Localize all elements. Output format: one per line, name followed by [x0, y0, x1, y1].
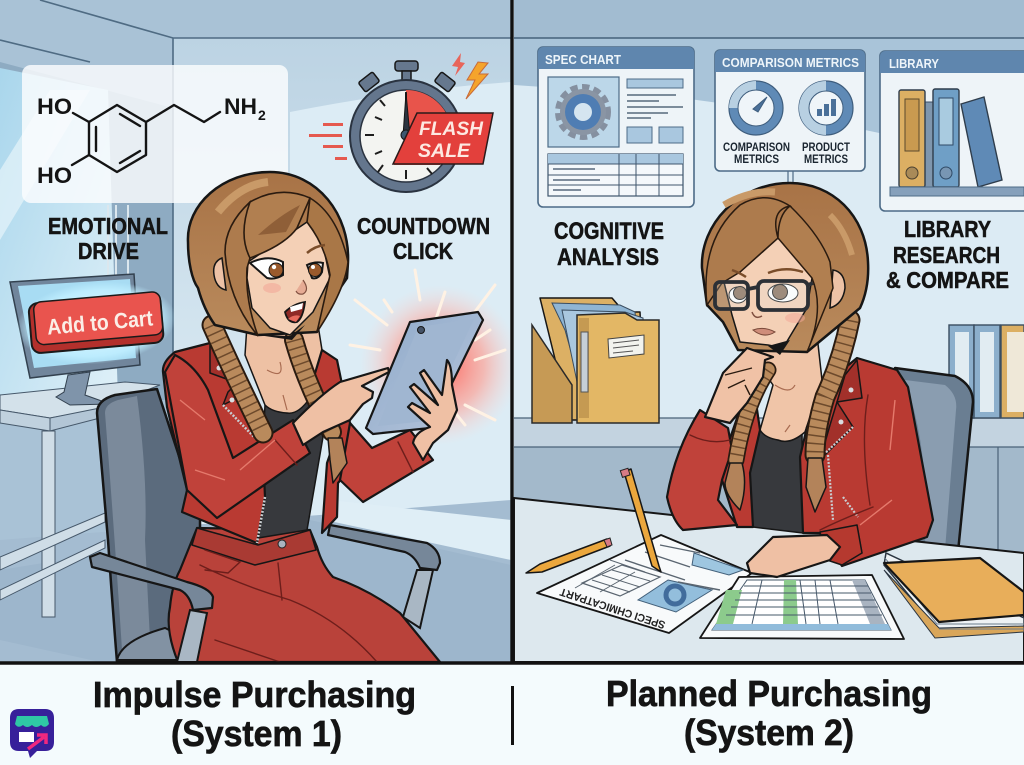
ear right: [830, 270, 845, 308]
bangs: [244, 192, 310, 258]
title: impulse purchasing: (System 1): [171, 713, 342, 754]
holding hand: [408, 360, 457, 460]
right braid: [294, 340, 347, 483]
heading: emotional drive: EMOTIONAL: [48, 213, 168, 239]
chair back and right armrest: [97, 389, 440, 662]
icon: pencil on desk: [526, 538, 612, 573]
glasses: [715, 281, 813, 310]
title: impulse purchasing: Impulse Purchasing: [93, 674, 416, 715]
head and hair: [188, 172, 348, 340]
desk surface: [514, 498, 1024, 662]
heading: library research and compare: [886, 216, 1009, 293]
title: impulse purchasing: [93, 674, 416, 754]
icon: stopwatch with flash sale tag: SALE: [418, 140, 471, 162]
spec sheet: SPECI CHMICATPART: [558, 585, 667, 631]
title: planned purchasing: (System 2): [684, 712, 854, 753]
icon: gauge dial: [729, 81, 783, 135]
left braid right figure: [725, 370, 768, 510]
face right: [723, 238, 812, 348]
jacket: [163, 343, 433, 543]
chin shadow: [768, 340, 790, 355]
bottom caption band background: [0, 662, 1024, 765]
card: comparison metrics: COMPARISON: [723, 142, 790, 154]
card: comparison metrics: METRICS: [734, 154, 779, 166]
title: planned purchasing: Planned Purchasing: [606, 673, 932, 714]
label background panel: dopamine molecule: HO: [37, 94, 72, 119]
left front strand: [225, 202, 258, 336]
spreadsheet: [700, 575, 904, 639]
heading: emotional drive: DRIVE: [78, 238, 139, 264]
pants: [169, 528, 440, 662]
bangs right: [706, 198, 790, 305]
office background right: [514, 0, 1024, 562]
woman: impulse buyer: [163, 172, 483, 662]
office background left: [0, 0, 511, 662]
pointing hand: [293, 368, 389, 445]
icon: gear: [559, 88, 607, 136]
panel: impulse purchasing scene: [0, 0, 520, 662]
icon: pencil on paper: [620, 468, 661, 572]
hair back: [188, 172, 348, 335]
shadow under chin: [258, 325, 305, 340]
panel: planned purchasing scene: [514, 0, 1024, 662]
forearm up to chin: [667, 410, 737, 530]
hand on desk: [747, 535, 840, 577]
desk items: [526, 468, 1024, 639]
heading: emotional drive: [48, 213, 168, 264]
icon: bar metric dial: [799, 81, 853, 135]
label background panel: dopamine molecule: NH: [224, 94, 257, 119]
left braid: [212, 325, 263, 433]
chest right: [745, 335, 822, 441]
hair back right: [702, 183, 868, 352]
spec sheet: [537, 535, 752, 633]
card: library: LIBRARY: [889, 57, 940, 71]
chest and neck: [245, 325, 322, 413]
heading: library research and compare: & COMPARE: [886, 267, 1009, 293]
icon: shop logo: [10, 709, 54, 758]
icon: binders on shelf: [890, 89, 1024, 196]
heading: cognitive analysis: ANALYSIS: [557, 244, 659, 271]
card: comparison metrics: COMPARISON METRICS: [722, 56, 859, 70]
right strand: [307, 198, 348, 332]
title: planned purchasing: [606, 673, 932, 753]
icon: stopwatch with flash sale tag: FLASH: [419, 118, 484, 140]
nose and mouth right: [752, 312, 762, 317]
icon: binders on right shelf: [949, 325, 1024, 418]
card: comparison metrics: [715, 50, 865, 185]
woman: planned buyer: [667, 183, 933, 566]
heading: countdown click: CLICK: [393, 238, 453, 264]
black top: [258, 398, 323, 538]
glow burst behind tablet: [350, 270, 520, 445]
heading: cognitive analysis: COGNITIVE: [554, 218, 664, 245]
card: spec chart: [538, 47, 694, 207]
chair left armrest: [90, 553, 213, 662]
mouth: [285, 302, 305, 322]
blush and nose: [263, 283, 281, 293]
heading: cognitive analysis: [554, 218, 664, 271]
eyes right: [729, 287, 747, 303]
card: comparison metrics: PRODUCT: [802, 142, 850, 154]
head and hair right: [702, 183, 868, 355]
card: spec chart: SPEC CHART: [545, 53, 621, 67]
sleeve left: [165, 355, 310, 518]
heading: countdown click: [357, 213, 490, 264]
jacket right: [718, 358, 933, 566]
heading: library research and compare: RESEARCH: [893, 242, 1000, 268]
ear: [214, 258, 226, 290]
card: comparison metrics: METRICS: [804, 154, 848, 166]
heading: library research and compare: LIBRARY: [904, 216, 991, 242]
icon: stopwatch with flash sale tag: [309, 53, 493, 192]
label background panel: dopamine molecule: 2: [258, 107, 266, 123]
monitor and desk: [0, 274, 160, 617]
icon: file organizer with folders: [532, 298, 659, 423]
face: [247, 222, 330, 335]
tablet: [366, 312, 483, 434]
black top right: [750, 430, 803, 533]
sleeve right: [340, 423, 433, 502]
heading: countdown click: COUNTDOWN: [357, 213, 490, 239]
label background panel: dopamine molecule: [22, 65, 288, 203]
chair right: [895, 368, 973, 552]
eyes: [250, 245, 325, 279]
yellow book: [884, 553, 1024, 638]
right braid right figure: [806, 320, 850, 512]
divider between captions: [511, 686, 514, 745]
button: add to cart: Add to Cart: [46, 305, 154, 340]
card: library: [880, 51, 1024, 211]
hair highlight: [218, 182, 268, 212]
label background panel: dopamine molecule: HO: [37, 163, 72, 188]
button: add to cart: [13, 275, 179, 371]
hand at chin: [705, 348, 773, 423]
